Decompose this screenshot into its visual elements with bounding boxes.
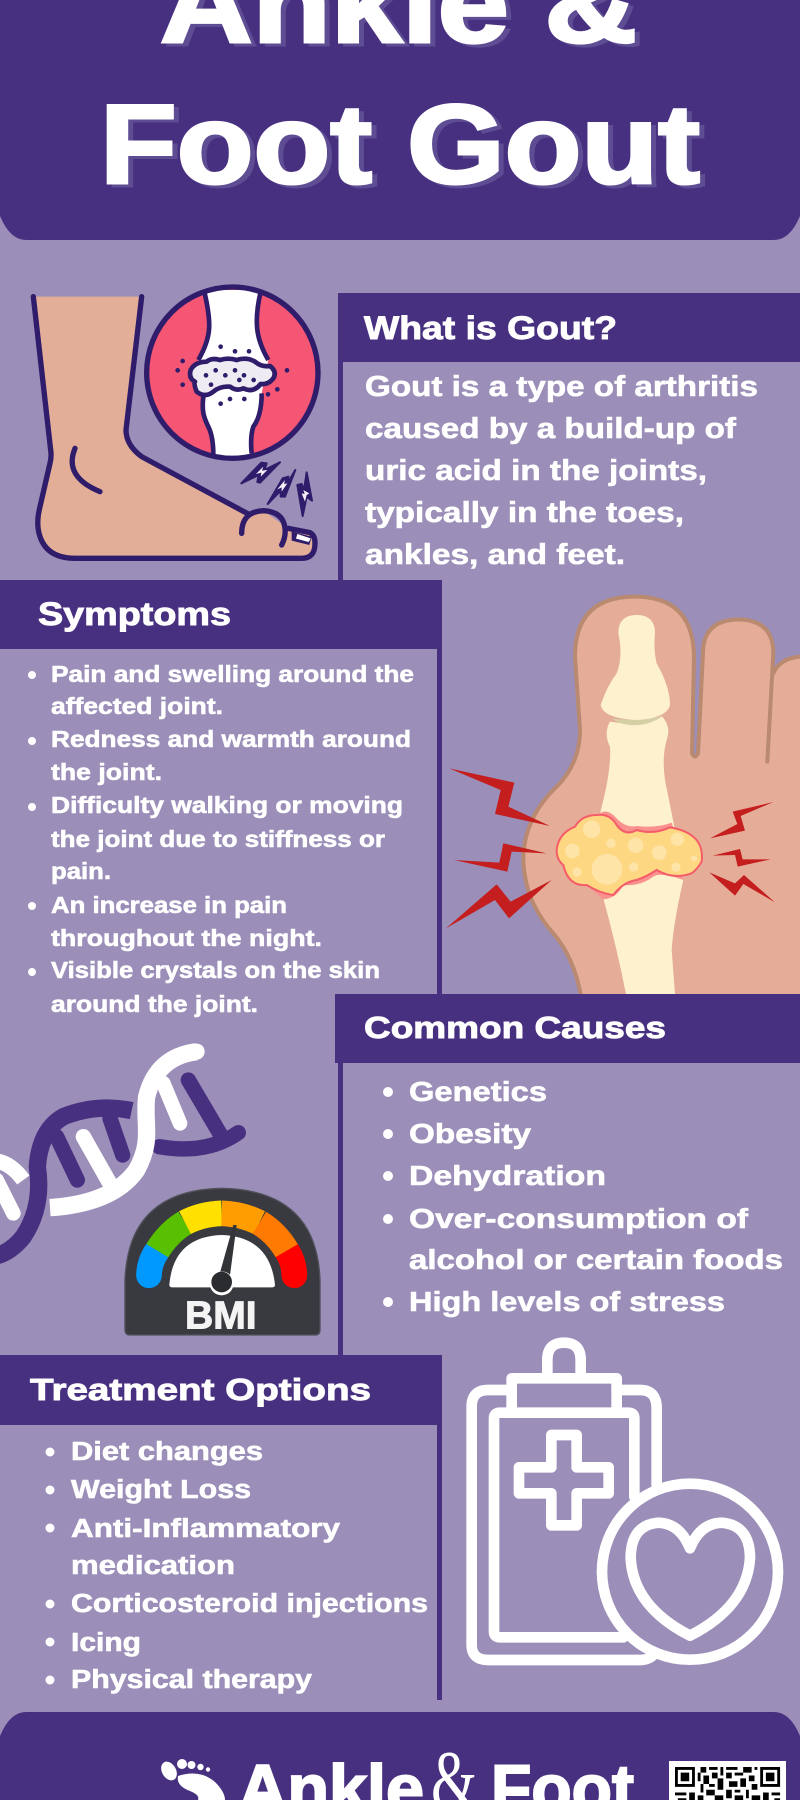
causes list <box>383 1076 783 1317</box>
icon: inflamed joint circle <box>147 287 318 458</box>
panel: what is gout <box>338 293 800 580</box>
text block: Gout is a type of arthritis <box>365 371 758 403</box>
heading bar: What is Gout? <box>364 310 617 346</box>
title: Foot Gout <box>100 82 700 207</box>
symptoms list: Pain and swelling around the <box>51 661 414 687</box>
panel: treatment options <box>0 1355 442 1700</box>
bone <box>600 615 683 994</box>
causes list: Over-consumption of <box>409 1203 749 1234</box>
symptoms list: An increase in pain <box>51 892 287 918</box>
symptoms list: Difficulty walking or moving <box>51 792 403 818</box>
treatment list: Icing <box>71 1629 141 1657</box>
uric acid crystal deposit <box>557 811 702 899</box>
heading bar: Treatment Options <box>30 1372 371 1407</box>
symptoms list: Redness and warmth around <box>51 726 411 752</box>
title <box>100 0 705 210</box>
causes list: Obesity <box>409 1118 532 1149</box>
heading bar <box>0 1355 442 1425</box>
footer banner <box>0 1712 800 1800</box>
symptoms list: the joint due to stiffness or <box>51 826 385 852</box>
heading bar <box>335 994 800 1063</box>
treatment list: Weight Loss <box>71 1476 251 1504</box>
text block: typically in the toes, <box>365 497 684 529</box>
heading bar <box>0 580 442 649</box>
symptoms list: affected joint. <box>51 693 223 719</box>
treatment list <box>46 1438 428 1694</box>
symptoms list <box>28 661 414 1017</box>
text block <box>365 371 758 571</box>
treatment list: Diet changes <box>71 1438 263 1466</box>
panel: symptoms <box>0 580 442 1017</box>
icon: BMI gauge <box>125 1188 320 1337</box>
text block: caused by a build-up of <box>365 413 736 445</box>
panel: common causes <box>335 994 800 1355</box>
symptoms list: Visible crystals on the skin <box>51 957 380 983</box>
heading bar <box>338 293 800 362</box>
icon: red pain bolts <box>446 768 775 928</box>
logo wordmark <box>238 1734 634 1800</box>
treatment list: Anti-Inflammatory <box>71 1515 341 1543</box>
header banner <box>0 0 800 240</box>
causes list: High levels of stress <box>409 1286 725 1317</box>
icon: BMI gauge: BMI <box>185 1294 257 1337</box>
icon: pain bolts <box>241 462 312 516</box>
causes list: alcohol or certain foods <box>409 1244 783 1275</box>
symptoms list: pain. <box>51 858 111 884</box>
causes list: Genetics <box>409 1076 547 1107</box>
illustration: swollen toe joint <box>446 597 800 994</box>
qr code <box>669 1761 786 1800</box>
symptoms list: around the joint. <box>51 991 258 1017</box>
symptoms list: throughout the night. <box>51 925 322 951</box>
icon: footprint logo <box>158 1759 225 1800</box>
symptoms list: the joint. <box>51 759 162 785</box>
icon: clipboard with heart <box>472 1343 778 1660</box>
treatment list: Corticosteroid injections <box>71 1590 428 1618</box>
icon: dna helix <box>0 1052 238 1257</box>
treatment list: Physical therapy <box>71 1666 313 1694</box>
heading bar: Common Causes <box>364 1010 666 1045</box>
illustration: foot with gout joint <box>33 287 318 558</box>
heading bar: Symptoms <box>38 596 231 632</box>
title: Foot Gout <box>105 85 705 210</box>
treatment list: medication <box>71 1552 235 1580</box>
text block: uric acid in the joints, <box>365 455 707 487</box>
text block: ankles, and feet. <box>365 539 625 571</box>
causes list: Dehydration <box>409 1160 606 1191</box>
